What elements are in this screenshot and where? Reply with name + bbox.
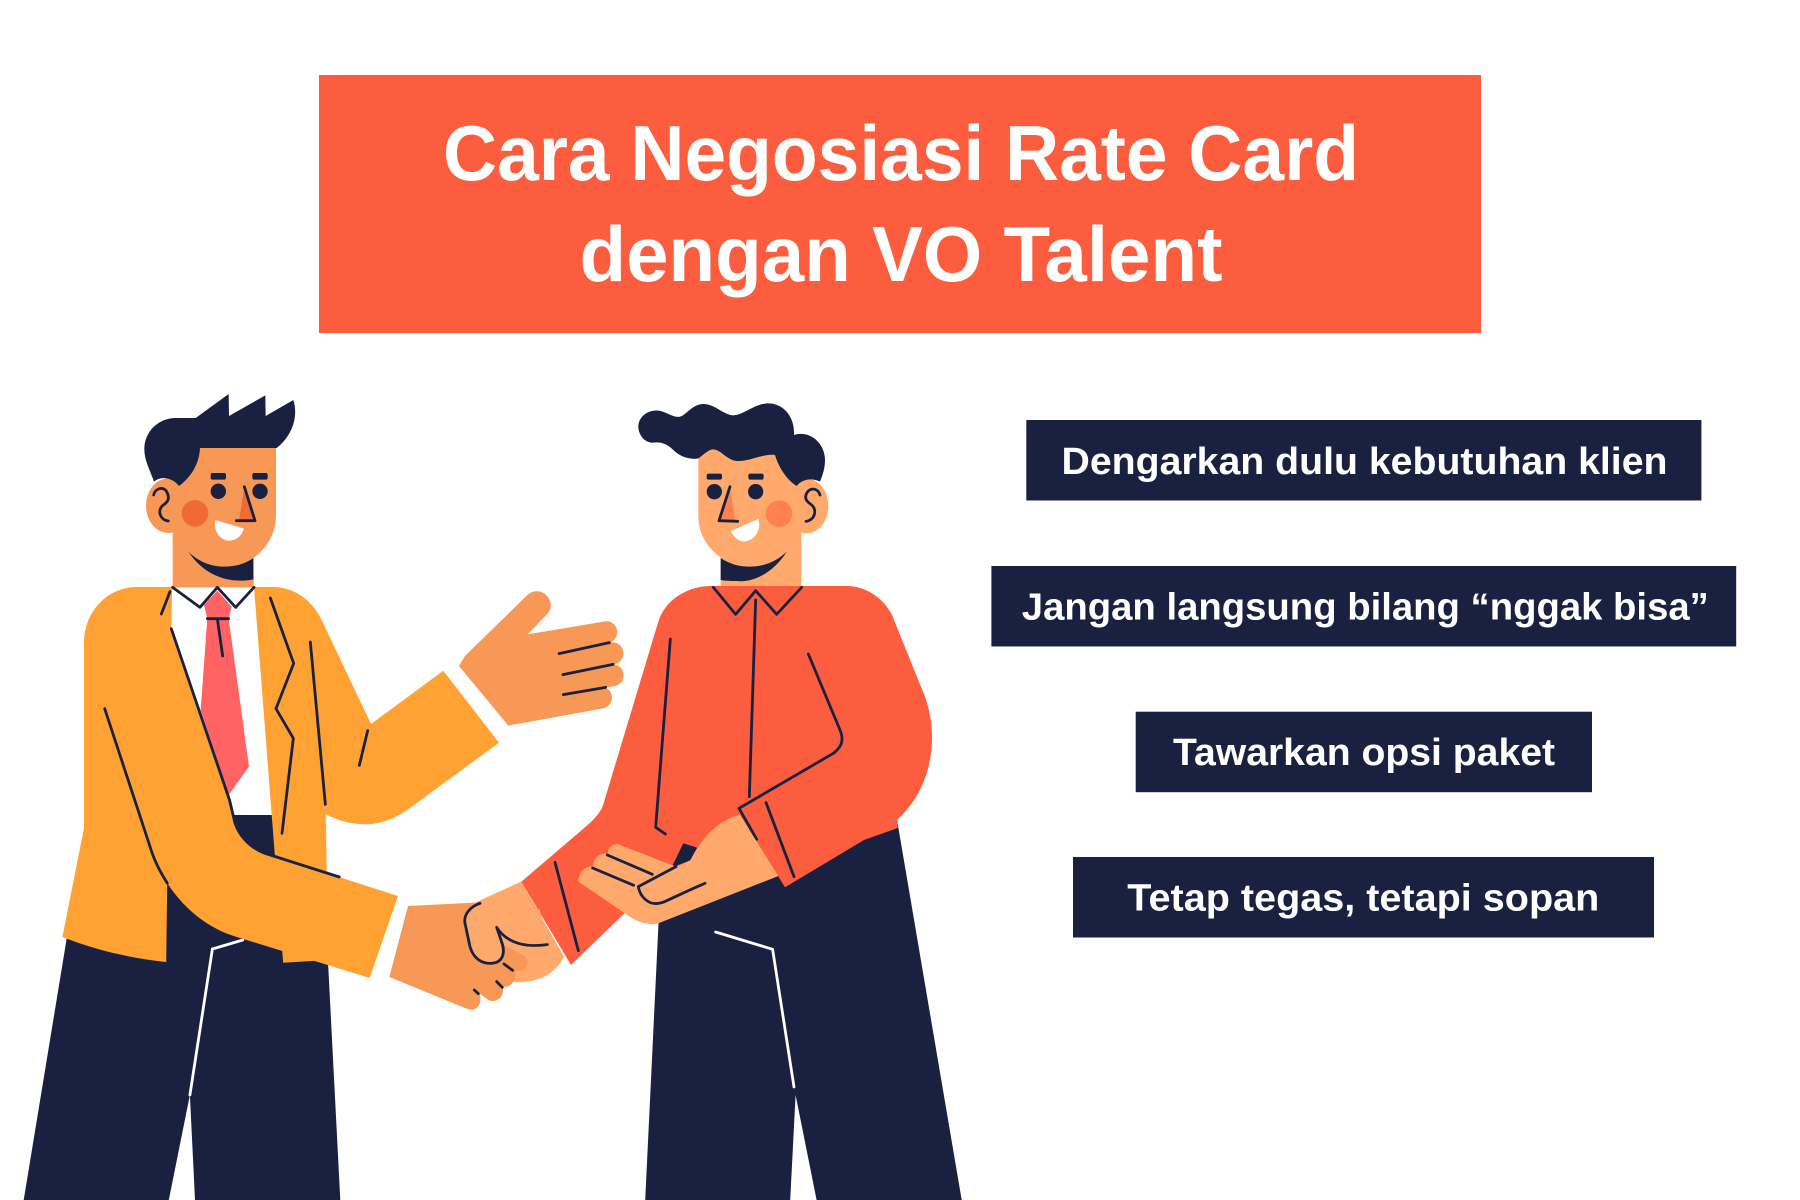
tip 4: Tetap tegas, tetapi sopan xyxy=(1127,878,1599,920)
right man trousers xyxy=(645,822,962,1200)
tip 1: Dengarkan dulu kebutuhan klien xyxy=(1062,441,1668,483)
tip 2: Jangan langsung bilang “nggak bisa” xyxy=(1022,586,1709,628)
left man jacket lines xyxy=(105,592,368,883)
title banner: Cara Negosiasi Rate Card xyxy=(443,109,1359,197)
illustration: left man in orange jacket xyxy=(24,394,624,1200)
handshake xyxy=(389,882,564,1010)
right man shirt lines xyxy=(555,587,842,951)
tip 3: Tawarkan opsi paket xyxy=(1173,732,1555,774)
left man raised hand xyxy=(459,591,624,726)
tip 1 xyxy=(1026,420,1701,500)
right man open hand xyxy=(578,815,778,924)
title banner xyxy=(319,75,1481,333)
tip 4 xyxy=(1073,857,1654,938)
left man trousers xyxy=(24,815,340,1200)
left man tie xyxy=(201,591,249,795)
left man head xyxy=(144,394,295,607)
illustration: right man in red shirt xyxy=(521,403,962,1200)
right man shirt xyxy=(521,586,932,965)
tip 2 xyxy=(991,566,1736,646)
right man belly patch xyxy=(672,843,697,867)
left man jacket left panel and handshake arm xyxy=(62,587,398,978)
right man neck and head xyxy=(638,403,828,588)
title banner: dengan VO Talent xyxy=(580,210,1223,298)
left man jacket right panel and raised arm xyxy=(254,587,499,963)
tip 3 xyxy=(1136,712,1592,792)
left man shirt xyxy=(172,587,272,815)
